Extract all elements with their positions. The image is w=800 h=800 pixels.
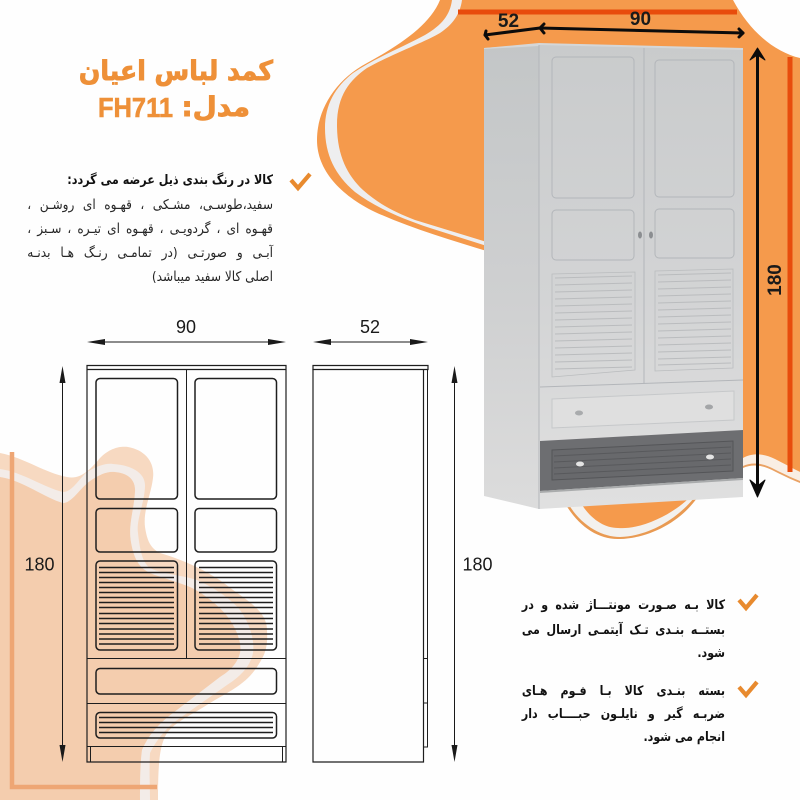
assembly line 3: شود. [697, 646, 725, 661]
text block: packaging note [521, 684, 725, 745]
packaging line 2: ضربـه گیر و نایلـون حبــــاب دار [522, 707, 725, 722]
colours line 3: آبـی و صورتـی (در تمامـی رنـگ هـا بدنـه [27, 245, 273, 261]
drawing dimension labels: 52 [360, 317, 380, 337]
model label: مدل: [181, 92, 250, 123]
red guide lines [458, 12, 790, 472]
photo dimension labels: 52 [498, 11, 519, 32]
text block: assembly note [521, 598, 726, 661]
bottom grey drawer [540, 430, 743, 493]
dimension arrow: width 90 [87, 339, 286, 345]
photo dimension labels: 90 [630, 9, 651, 30]
top drawer [552, 391, 734, 428]
door knobs [638, 232, 653, 238]
background blob: bottom left pale orange [0, 447, 267, 800]
wardrobe photo [484, 43, 743, 509]
assembly line 1: کالا بـه صـورت مونتـــاژ شده و در [522, 598, 725, 613]
drawing dimension labels: 180 [24, 554, 55, 574]
wardrobe front [539, 45, 743, 509]
text block: colours [27, 172, 274, 285]
photo dimension arrows [485, 24, 765, 497]
dimension arrow: height left [60, 366, 66, 762]
wardrobe louvers [552, 269, 733, 377]
background blob: orange arc under wardrobe [566, 498, 697, 539]
colours line 2: قهـوه ای ، گردویـی ، قهـوه ای تیـره ، سـبز ، [27, 221, 273, 237]
packaging line 1: بسته بنـدی کالا بـا فـوم هـای [522, 684, 725, 699]
dimension arrow: depth 52 [313, 339, 428, 345]
drawing dimension labels [24, 317, 493, 574]
packaging line 3: انجام می شود. [643, 730, 725, 745]
wardrobe side [484, 44, 539, 509]
colours line 1: سفید،طوسـی، مشـکی ، قهـوه ای روشـن ، [27, 197, 273, 213]
side elevation drawing [313, 366, 428, 762]
background blob: lower right wave stripe [743, 454, 800, 482]
background blob: top right orange [317, 0, 800, 539]
drawing dimension labels: 90 [176, 317, 196, 337]
drawing dimension labels: 180 [462, 554, 493, 574]
model code: FH711 [98, 92, 173, 123]
dimension arrow: height right [452, 366, 458, 762]
icon: check top [291, 174, 310, 188]
icon: check bullet two [739, 682, 757, 695]
photo dimension labels [498, 9, 786, 296]
assembly line 2: بستــه بنـدی تـک آیتمـی ارسال می [522, 623, 725, 638]
front elevation drawing [87, 366, 286, 762]
photo dimension labels: 180 [765, 264, 786, 296]
colours heading: کالا در رنگ بندی ذیل عرضه می گردد: [67, 173, 273, 188]
colours line 4: اصلی کالا سفید میباشد) [152, 269, 273, 285]
title: کمد لباس اعیان [79, 56, 273, 87]
icon: check bullet one [739, 595, 757, 608]
